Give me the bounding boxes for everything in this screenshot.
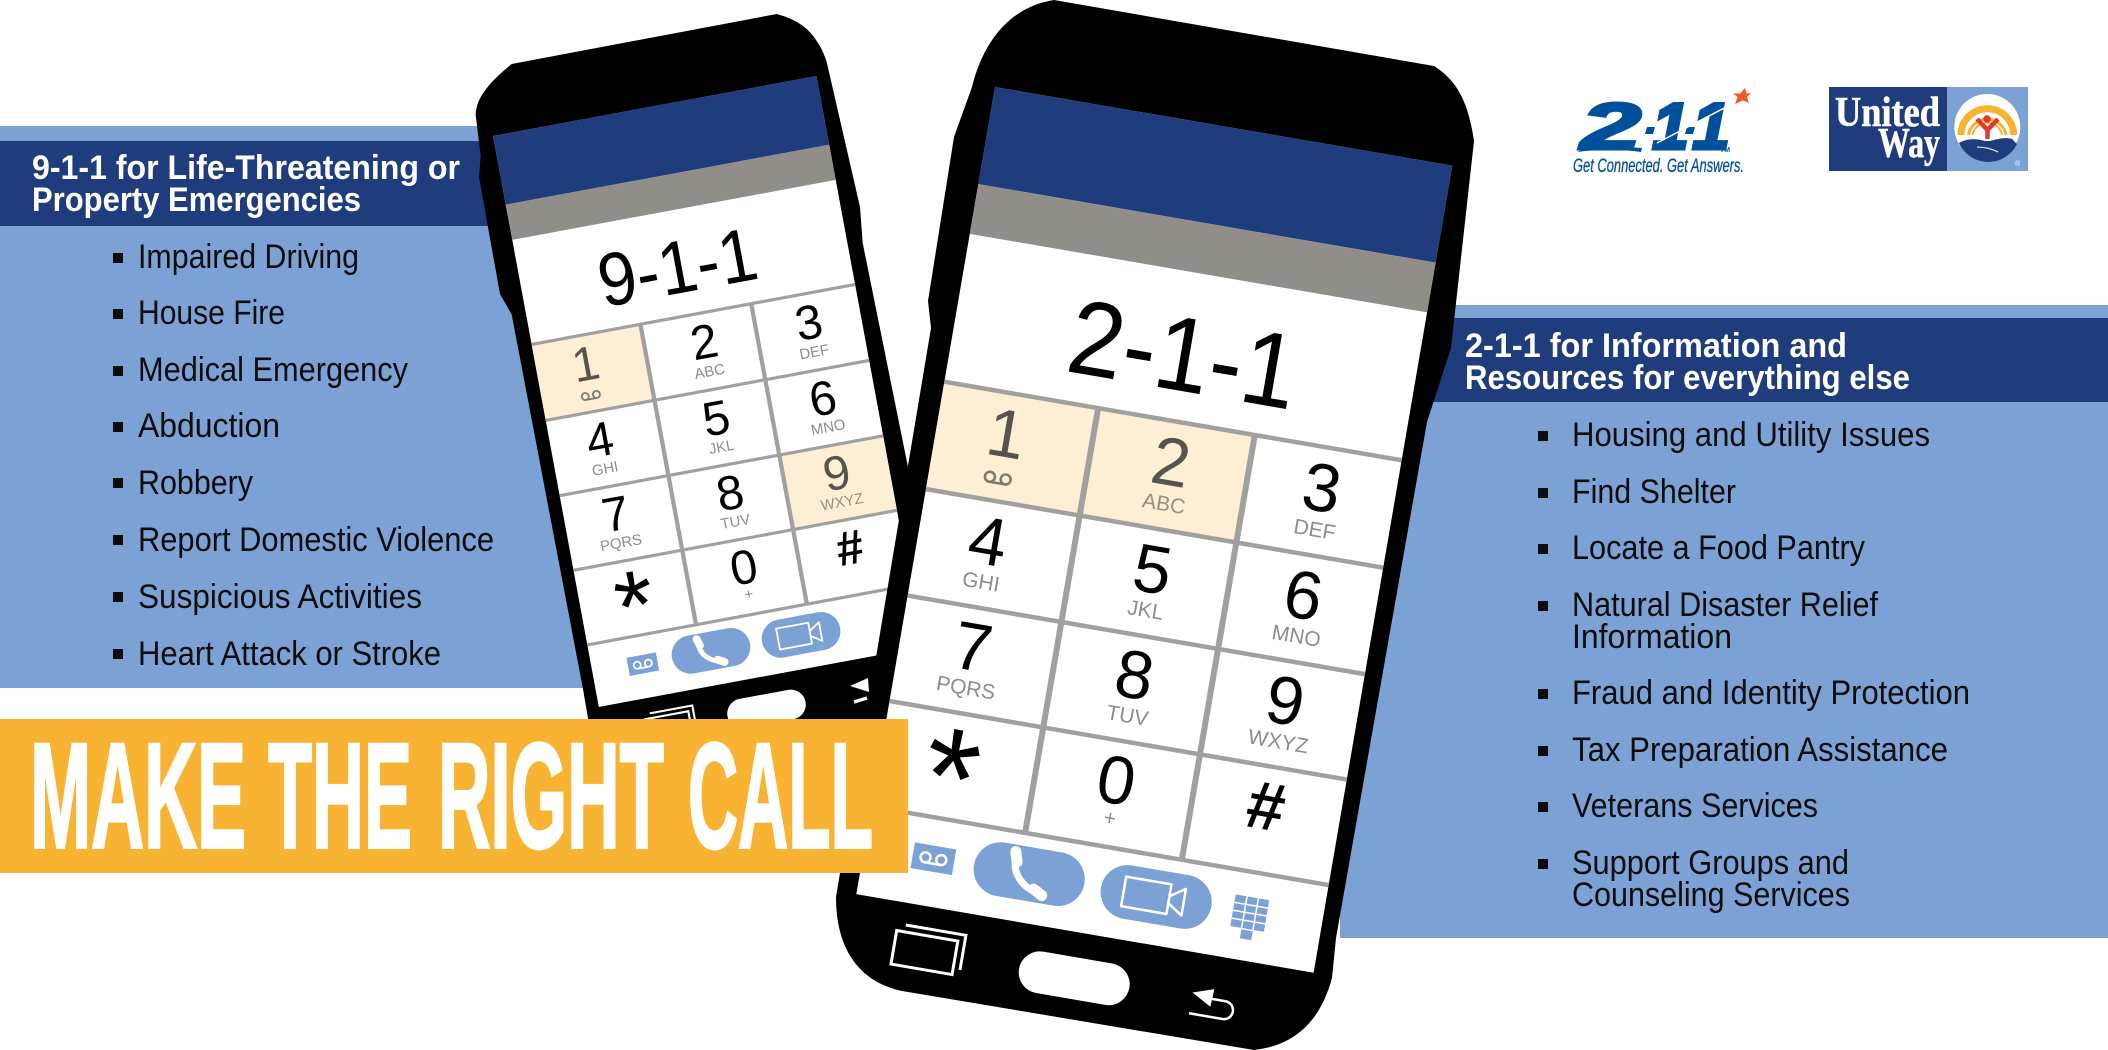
banner: make the right call: [0, 712, 908, 880]
banner title: THE: [268, 712, 412, 880]
logo: 2-1-1: [1573, 88, 1751, 177]
keypad: DEF: [1292, 515, 1337, 545]
keypad: 5: [1127, 529, 1178, 610]
icon: back arrow: [850, 678, 869, 702]
panel: 2-1-1 resources: [1340, 305, 2108, 938]
list: 2-1-1 reasons: Find Shelter: [1572, 473, 1736, 511]
keypad: 0: [726, 539, 762, 597]
keypad: PQRS: [599, 532, 643, 555]
keypad: PQRS: [934, 672, 997, 705]
list: 2-1-1 reasons: [1538, 416, 1970, 914]
banner: make the right call: CALL: [688, 712, 873, 880]
list: 9-1-1 reasons: Suspicious Activities: [138, 578, 422, 616]
icon: recent apps: [644, 705, 698, 743]
list: 2-1-1 reasons: Veterans Services: [1572, 787, 1818, 825]
logo: United Way: [1829, 87, 2028, 171]
keypad: ABC: [1141, 489, 1187, 519]
list: 9-1-1 reasons: Robbery: [138, 464, 253, 502]
list: 9-1-1 reasons: Impaired Driving: [138, 238, 359, 276]
keypad: 5: [698, 390, 734, 448]
keypad: [532, 284, 916, 671]
icon: call button: [668, 625, 754, 677]
keypad: DEF: [798, 342, 830, 363]
icon: United Way emblem: [1954, 94, 2021, 168]
list: 2-1-1 reasons: Support Groups and: [1572, 844, 1849, 882]
keypad: #: [832, 519, 868, 577]
keypad: 6: [805, 370, 841, 428]
heading: 2-1-1: Resources for everything else: [1465, 359, 1910, 397]
keypad: 8: [1109, 634, 1159, 716]
keypad: 4: [963, 501, 1013, 582]
banner title: [30, 712, 873, 880]
icon: home button: [1015, 948, 1133, 1008]
phone: 9-1-1: [476, 14, 931, 754]
logo wordmark: United: [1835, 90, 1940, 136]
keypad: 3: [1297, 447, 1347, 529]
list: 9-1-1 reasons: Report Domestic Violence: [138, 521, 494, 559]
logo wordmark: [1835, 90, 1940, 167]
panel: 9-1-1 emergencies: [0, 126, 640, 688]
keypad: *: [910, 695, 991, 859]
keypad: 6: [1278, 555, 1328, 636]
phone: 2-1-1: [836, 0, 1474, 1050]
keypad: TUV: [1105, 701, 1150, 731]
screen: 2-1-1: [845, 87, 1452, 1039]
logo mark: 1: [1652, 89, 1689, 163]
icon: home button: [725, 687, 808, 731]
keypad: WXYZ: [820, 491, 865, 515]
heading: 2-1-1: [1340, 318, 2108, 402]
icon: keypad grid: [1229, 894, 1269, 942]
keypad: MNO: [1270, 621, 1322, 652]
keypad: 2: [686, 313, 722, 371]
list: 2-1-1 reasons: Information: [1572, 618, 1732, 656]
icon: back arrow: [1189, 986, 1236, 1021]
list: 2-1-1 reasons: Counseling Services: [1572, 876, 1850, 914]
icon: call button: [969, 838, 1089, 910]
keypad: 9: [1260, 660, 1310, 742]
banner title: RIGHT: [438, 712, 664, 880]
keypad: 9: [819, 445, 855, 503]
keypad: +: [743, 586, 755, 604]
keypad: JKL: [708, 438, 736, 458]
keypad: GHI: [961, 568, 1001, 597]
keypad: #: [1241, 766, 1291, 847]
list: 9-1-1 reasons: Heart Attack or Stroke: [138, 635, 441, 673]
dialed number: 9-1-1: [591, 211, 764, 323]
list: 9-1-1 reasons: [113, 238, 494, 673]
list: 2-1-1 reasons: Fraud and Identity Protection: [1572, 674, 1970, 712]
list: 2-1-1 reasons: Locate a Food Pantry: [1572, 529, 1865, 567]
heading: 9-1-1: Property Emergencies: [32, 181, 361, 219]
keypad: [865, 382, 1402, 921]
logo mark: [1577, 89, 1735, 163]
keypad: JKL: [1126, 596, 1165, 625]
keypad: +: [1102, 806, 1118, 831]
keypad: 1: [568, 335, 604, 393]
icon: video button: [1096, 861, 1216, 933]
keypad: TUV: [719, 512, 752, 533]
heading: 9-1-1: 9-1-1 for Life-Threatening or: [32, 149, 460, 187]
icon: recent apps: [891, 924, 966, 976]
logo wordmark: Way: [1878, 121, 1940, 167]
dialed number: 2-1-1: [1060, 277, 1307, 432]
list: 2-1-1 reasons: Housing and Utility Issues: [1572, 416, 1930, 454]
list: 9-1-1 reasons: Abduction: [138, 407, 280, 445]
list: 2-1-1 reasons: Tax Preparation Assistance: [1572, 731, 1948, 769]
icon: voicemail: [911, 842, 956, 875]
logo mark: 1: [1692, 89, 1730, 163]
icon: star: [1733, 88, 1751, 104]
keypad: 3: [791, 294, 827, 352]
heading: 2-1-1: 2-1-1 for Information and: [1465, 327, 1847, 365]
keypad: 4: [582, 411, 618, 469]
heading: 9-1-1: [0, 141, 640, 226]
keypad: GHI: [591, 459, 620, 480]
screen: 9-1-1: [493, 76, 931, 754]
icon: United Way emblem: ®: [2015, 160, 2021, 168]
keypad: WXYZ: [1246, 725, 1310, 758]
logo: 2-1-1: TM: [1720, 147, 1730, 154]
keypad: MNO: [810, 417, 847, 439]
keypad: 2: [1146, 422, 1196, 503]
icon: video button: [759, 609, 844, 661]
logo mark: 2: [1578, 89, 1641, 163]
keypad: 8: [712, 464, 748, 522]
tagline: Get Connected. Get Answers.: [1573, 156, 1744, 177]
list: 2-1-1 reasons: Natural Disaster Relief: [1572, 586, 1878, 624]
keypad: 7: [598, 485, 634, 543]
list: 9-1-1 reasons: Medical Emergency: [138, 351, 408, 389]
keypad: ABC: [693, 362, 727, 383]
keypad: 7: [948, 607, 998, 688]
banner title: MAKE: [30, 712, 246, 880]
list: 9-1-1 reasons: House Fire: [138, 294, 285, 332]
keypad: *: [607, 548, 665, 664]
icon: voicemail: [626, 652, 659, 676]
keypad: 0: [1091, 740, 1141, 821]
keypad: 1: [981, 393, 1031, 475]
